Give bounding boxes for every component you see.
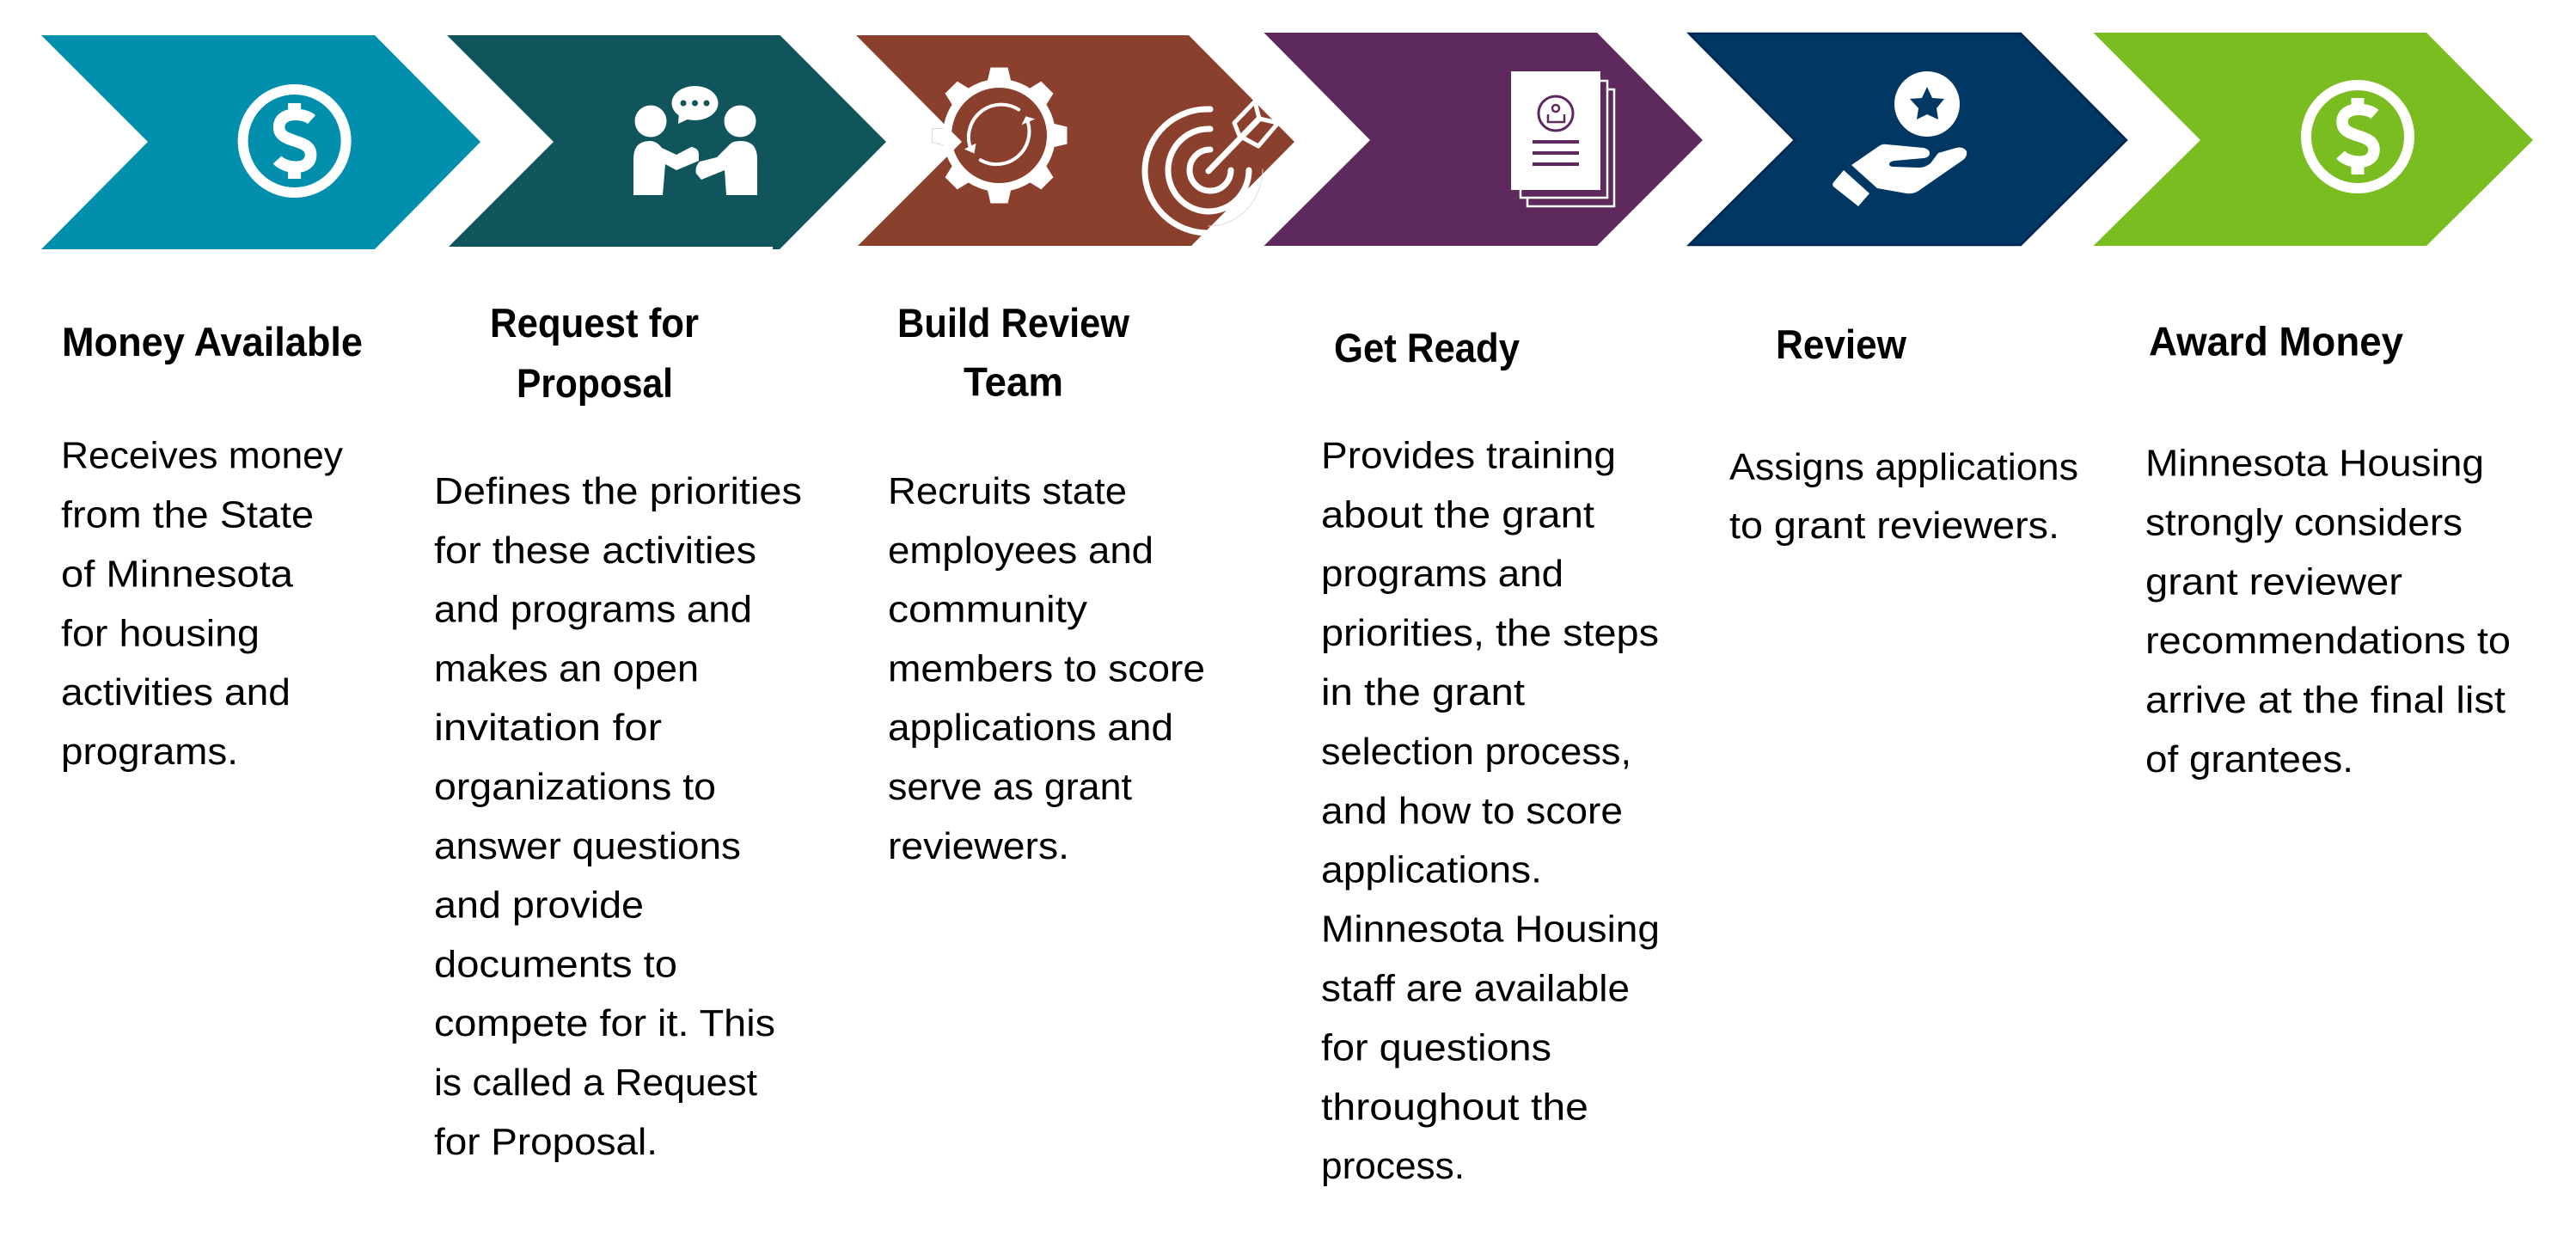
body text: for Proposal. [434,1121,658,1163]
icon: two people talking [633,86,757,195]
heading [897,300,1129,405]
body text: Defines the priorities [434,470,802,512]
body text: programs. [61,731,238,773]
body text: applications and [888,707,1173,749]
chevron: brown [856,35,1294,246]
body text: staff are available [1321,968,1630,1009]
heading: Get Ready [1334,325,1520,370]
column 6: award money [2145,319,2511,781]
icon: dollar coin [243,89,346,193]
body text: throughout the [1321,1086,1588,1128]
body text: in the grant [1321,671,1525,713]
chevron: dark teal [447,35,886,249]
body text: and how to score [1321,790,1623,832]
heading: Build Review [897,300,1129,346]
chevron: teal [41,35,480,249]
step 1: money available chevron [41,35,480,249]
body text: Receives money [61,435,343,477]
heading: Money Available [62,319,363,364]
body text: and provide [434,885,644,927]
column 4: get ready [1321,325,1660,1187]
step 6: award money chevron [2094,33,2533,246]
body text: grant reviewer [2145,560,2402,603]
body text: employees and [888,530,1153,572]
heading: Team [964,359,1063,405]
body text: programs and [1321,553,1563,595]
step 4: get ready chevron [1264,33,1703,246]
body text [1729,446,2078,547]
icon: target with dart [1145,101,1278,234]
body text: of Minnesota [61,553,294,595]
body text: answer questions [434,825,741,867]
body text [1321,434,1660,1187]
body text: Minnesota Housing [1321,909,1660,951]
column 3: build review team [888,300,1205,867]
heading: Proposal [517,360,673,406]
body text: reviewers. [888,825,1069,867]
step 5: review chevron [1689,34,2126,245]
chevron: purple [1264,33,1703,246]
body text [2145,442,2511,781]
body text: selection process, [1321,731,1631,773]
body text [888,470,1205,867]
body text: Minnesota Housing [2145,442,2484,485]
column 2: request for proposal [434,300,802,1163]
icon: gear with circular arrows [932,67,1068,203]
chevron: navy [1689,34,2126,245]
body text: activities and [61,671,291,713]
icon: dollar coin [2306,85,2409,188]
body text: Recruits state [888,470,1127,512]
column 5: review [1729,321,2078,547]
body text: members to score [888,647,1205,689]
body text: is called a Request [434,1062,757,1104]
body text: and programs and [434,589,752,631]
body text: community [888,589,1087,631]
body text: documents to [434,943,677,985]
icon: hand holding star [1833,71,1967,206]
step 2: request for proposal chevron [447,35,886,249]
heading: Award Money [2149,319,2403,364]
body text: for these activities [434,530,756,572]
body text: arrive at the final list [2145,679,2506,721]
body text: for questions [1321,1026,1551,1068]
body text: of grantees. [2145,738,2353,781]
body text: for housing [61,612,260,654]
body text: to grant reviewers. [1729,505,2059,547]
body text: from the State [61,493,314,536]
chevron: green [2094,33,2533,246]
body text: recommendations to [2145,620,2511,662]
body text: organizations to [434,766,716,808]
body text: process. [1321,1145,1465,1187]
body text: invitation for [434,707,662,749]
body text: priorities, the steps [1321,612,1659,654]
column 1: money available [61,319,363,773]
body text: strongly considers [2145,501,2463,543]
heading: Review [1776,321,1906,367]
step 3: build review team chevron [856,35,1294,246]
heading: Request for [490,300,699,346]
body text: compete for it. This [434,1002,775,1044]
body text: about the grant [1321,493,1594,536]
body text: Assigns applications [1729,446,2078,488]
heading [490,300,699,406]
body text [434,470,802,1163]
icon: stacked documents [1511,71,1614,206]
body text: serve as grant [888,766,1132,808]
body text: makes an open [434,647,699,689]
body text [61,435,343,773]
body text: applications. [1321,849,1542,891]
body text: Provides training [1321,434,1616,476]
